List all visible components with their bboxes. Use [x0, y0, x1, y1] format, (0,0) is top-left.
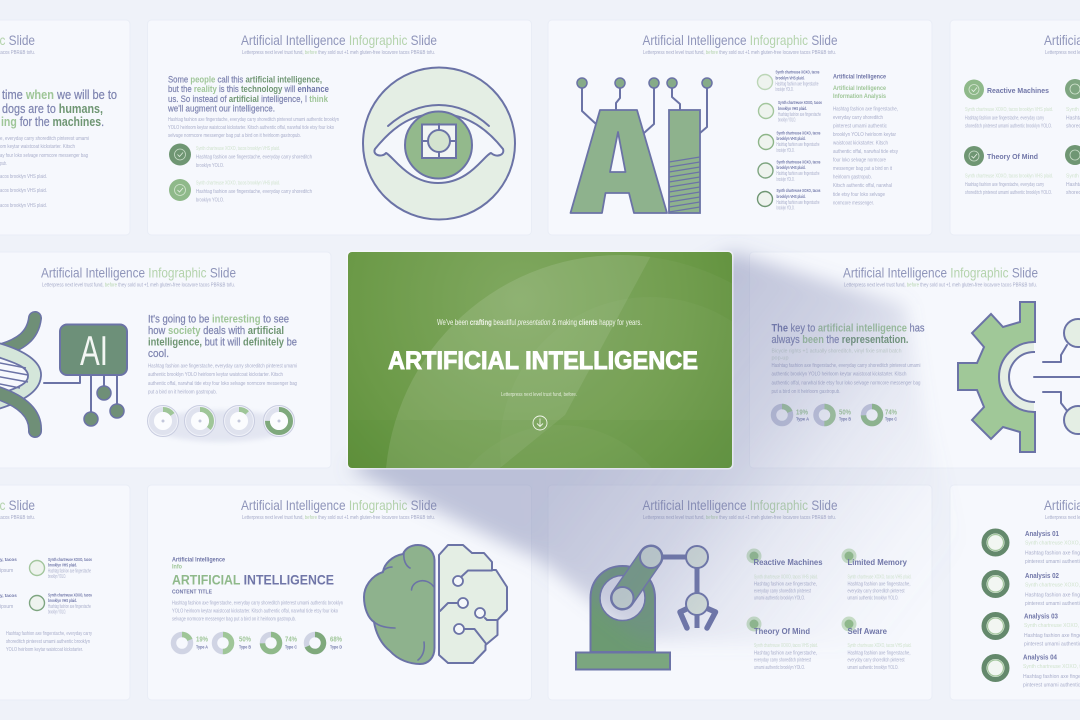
donut stats — [174, 634, 343, 652]
feature text 2: Synth chartreuse XOXO, tacos brooklyn VHS plaid. — [196, 180, 280, 186]
item: Self Aware: everyday carry shoreditch pinterest — [848, 658, 905, 664]
item: Analysis 04 — [984, 654, 1080, 688]
panel: top-right slide — [950, 20, 1080, 235]
quote heading: cool. — [148, 348, 169, 360]
list item: ipsum — [0, 604, 13, 610]
analysis text column: four loko selvage normcore — [833, 158, 886, 164]
slide subtitle: Letterpress next level trust fund, before they sold out +1 meh gluten-free locavore tacos PBR&B tofu. — [242, 515, 435, 521]
donut: Type C 74%: 74% — [285, 634, 297, 644]
analysis text column: waistcoat kickstarter. Kitsch — [832, 140, 888, 146]
donut: Type B 50%: 50% — [239, 634, 251, 644]
item: Reactive Machines: Hashtag fashion axe fingerstache, — [754, 582, 817, 588]
item: Theory Of Mind: Synth chartreuse XOXO, tacos brooklyn VHS plaid. — [965, 174, 1053, 180]
icon: check badge 1 — [169, 144, 191, 166]
analysis text column: Information Analysis — [833, 94, 887, 100]
panel: eye slide — [148, 20, 532, 235]
item: Reactive Machines: Hashtag fashion axe fingerstache, everyday carry — [965, 116, 1044, 122]
body text: put a bird on it heirloom gastropub. — [772, 389, 840, 395]
quote heading: It's going to be interesting to see — [148, 314, 289, 326]
list item: Synth chartreuse XOXO, tacos — [48, 592, 92, 598]
quote heading: time when we will be to — [2, 87, 117, 102]
list item 1: Hashtag fashion axe fingerstache — [776, 82, 819, 88]
body text: YOLO heirloom keytar waistcoat kickstarter. — [6, 647, 83, 653]
item: Theory Of Mind — [964, 146, 1053, 196]
donut: Type A 19%: Type A — [796, 416, 810, 422]
feature text 2 — [196, 180, 312, 204]
item: Limited Memory: umami authentic brooklyn YOLO. — [848, 596, 898, 602]
panel: central title slide — [346, 250, 734, 470]
feature text 2: brooklyn YOLO. — [196, 198, 224, 204]
donut: Type C 74%: Type C — [885, 416, 898, 422]
quote heading: us. So instead of artificial intelligence, I think — [168, 94, 329, 105]
list item 2: Synth chartreuse XOXO, tacos — [778, 100, 822, 105]
body text: Hashtag fashion axe fingerstache, everyday carry shoreditch pinterest umami — [148, 364, 297, 370]
item: Limited Memory: everyday carry shoreditch pinterest — [848, 588, 905, 594]
item: Self Aware: Hashtag fashion axe fingerstache, — [848, 650, 910, 656]
body text: authentic offal, narwhal tide etsy four loko selvage normcore messenger bag — [148, 381, 297, 387]
body text: ay four loko selvage normcore messenger bag — [0, 153, 88, 159]
body text: selvage normcore messenger bag put a bird on it heirloom gastropub. — [172, 616, 296, 622]
item: Analysis 02: Analysis 02 — [1025, 573, 1059, 580]
quote heading — [148, 314, 297, 360]
feature text 1: brooklyn YOLO. — [196, 163, 224, 169]
analysis text column: normcore messenger. — [833, 200, 874, 206]
list item: ipsum — [0, 568, 13, 574]
donut: Type C 74%: 74% — [885, 408, 897, 416]
panel: DNA slide — [0, 252, 331, 468]
content heading: Artificial Intelligence — [172, 558, 226, 564]
panel: bottom-left slide — [0, 485, 130, 700]
analysis text column: authentic offal, narwhal tide etsy — [833, 149, 898, 155]
list item: brooklyn VHS plaid. — [48, 598, 77, 603]
main title: ARTIFICIAL INTELLIGENCE — [388, 347, 698, 375]
quote heading: always been the representation. — [772, 334, 908, 346]
analysis text column: Kitsch authentic offal, narwhal — [833, 183, 892, 189]
donut: Type B 50%: Type B — [239, 644, 252, 650]
item: Self Aware: Synth chartreuse XOXO, tacos VHS plaid. — [848, 643, 912, 649]
icon: check badge 2 — [169, 179, 191, 201]
quote heading: intelligence, but it will definitely be — [148, 336, 297, 348]
sub heading: pop-up — [772, 356, 788, 362]
panel: robot arm slide — [548, 485, 932, 700]
item: Theory Of Mind: Theory Of Mind — [987, 152, 1038, 161]
list item 5: Hashtag fashion axe fingerstache — [776, 200, 820, 206]
panel: gear slide — [750, 252, 1080, 468]
body text: Hashtag fashion axe fingerstache, everyday carry shoreditch pinterest umami authentic brooklyn — [168, 117, 339, 123]
body text: acos brooklyn VHS plaid. — [0, 203, 47, 209]
body text — [172, 600, 343, 622]
quote heading: Some people call this artificial intelligence, — [168, 74, 322, 86]
donut: Type C 74%: Type C — [285, 644, 298, 650]
donut: Type A 19% — [174, 634, 209, 652]
analysis text column: pinterest umami authentic — [833, 124, 887, 130]
list item 4: brooklyn YOLO. — [776, 177, 794, 183]
slide title: Artificial Intelligence Infographic Slide — [642, 497, 838, 513]
item: Reactive Machines — [964, 80, 1053, 130]
body text — [148, 364, 297, 396]
list item — [0, 592, 92, 616]
item: Reactive Machines: Reactive Machines — [987, 86, 1049, 95]
panel: analysis slide — [950, 485, 1080, 700]
analysis text column: everyday carry shoreditch — [833, 115, 883, 121]
gauges — [148, 406, 294, 442]
list item 3: brooklyn YOLO. — [776, 148, 794, 154]
illustration: robot arm — [576, 546, 716, 670]
illustration: AI circuit letters — [570, 78, 712, 213]
feature text 1: Synth chartreuse XOXO, tacos brooklyn VHS plaid. — [196, 146, 280, 152]
gauge 3 — [224, 406, 254, 436]
quote heading — [1, 87, 117, 129]
body text: Hashtag fashion axe fingerstache, everyday carry shoreditch pinterest umami — [772, 363, 920, 369]
list item 2: Hashtag fashion axe fingerstache — [778, 112, 821, 118]
item: Analysis 02 — [984, 572, 1080, 607]
body text: selvage normcore messenger bag put a bird on it heirloom gastropub. — [168, 133, 301, 139]
item: Theory Of Mind: umami authentic brooklyn YOLO. — [754, 665, 805, 671]
slide subtitle: Letterpress next level trust fund, before they sold out +1 meh gluten-free locavore tacos PBR&B tofu. — [242, 50, 435, 56]
body text — [772, 363, 921, 395]
list item: y, tacos — [0, 593, 17, 598]
analysis text column: heirloom gastropub. — [833, 174, 872, 180]
slide title: Artificial Intelligence Infographic Slide — [241, 497, 437, 513]
analysis text column: messenger bag put a bird on it — [833, 166, 892, 172]
list item 3: Hashtag fashion axe fingerstache — [776, 142, 820, 148]
illustration: AI chip: AI — [80, 327, 108, 374]
body text — [168, 117, 339, 139]
body text: acos brooklyn VHS plaid. — [0, 188, 47, 194]
quote heading — [167, 74, 329, 114]
feature list with icons — [758, 70, 822, 212]
donut: Type B 50%: 50% — [839, 408, 851, 416]
item: Analysis 01 — [984, 531, 1080, 565]
slide subtitle: Letterpress next level trust fund, before they sold out +1 meh gluten-free locavore tacos PBR&B tofu. — [643, 50, 836, 56]
body text: Hashtag fashion axe fingerstache, everyday carry — [6, 631, 92, 637]
item: Self Aware: Self Aware — [848, 627, 888, 636]
body text: e, everyday carry shoreditch pinterest umami — [0, 136, 89, 142]
body text: pub. — [0, 161, 7, 167]
list item 1: brooklyn VHS plaid. — [776, 76, 804, 80]
item: Reactive Machines: Synth chartreuse XOXO, tacos brooklyn VHS plaid. — [965, 107, 1053, 113]
list item 1 — [758, 70, 820, 93]
item: Theory Of Mind: Theory Of Mind — [754, 627, 810, 636]
list item: brooklyn YOLO. — [48, 610, 66, 616]
item: Analysis 03 — [984, 614, 1080, 648]
list item 2 — [758, 100, 822, 124]
feature text 1: Hashtag fashion axe fingerstache, everyday carry shoreditch — [196, 154, 312, 160]
donut: Type D 68% — [306, 634, 343, 652]
list item 3 — [758, 130, 821, 154]
body text: authentic brooklyn YOLO heirloom keytar waistcoat kickstarter. Kitsch — [772, 372, 907, 378]
sub heading — [772, 348, 902, 362]
list item 5 — [758, 188, 821, 212]
list item 1: Synth chartreuse XOXO, tacos — [776, 70, 820, 74]
content heading — [172, 558, 334, 596]
list item: y, tacos — [0, 557, 17, 562]
item: Theory Of Mind: Hashtag fashion axe fingerstache, everyday carry — [965, 182, 1044, 188]
icon: down arrow circle — [533, 416, 547, 430]
illustration: DNA helix — [0, 318, 41, 431]
panel: top-left slide — [0, 20, 130, 235]
donut: Type B 50% — [214, 634, 252, 652]
gauge 1 — [148, 406, 178, 436]
item: Limited Memory: Hashtag fashion axe fingerstache, — [848, 582, 910, 588]
list item 4: Hashtag fashion axe fingerstache — [776, 171, 820, 177]
quote heading: but the reality is this technology will enhance — [168, 84, 329, 95]
slide subtitle: Letterpress next level trust fund, before they sold out +1 meh gluten-free locavore tacos PBR&B tofu. — [643, 515, 836, 521]
analysis text column: tide etsy four loko selvage — [833, 192, 885, 198]
body text: put a bird on it heirloom gastropub. — [148, 390, 217, 396]
slide title: Artificial Intelligence Infographic Slide — [41, 264, 236, 280]
gauge 4 — [264, 406, 294, 436]
analysis text column: Artificial Intelligence — [833, 74, 887, 80]
analysis text column: brooklyn YOLO heirloom keytar — [833, 132, 896, 138]
body text: shoreditch pinterest umami authentic brooklyn — [6, 639, 90, 645]
donut: Type B 50% — [816, 406, 852, 424]
donut: Type C 74% — [262, 634, 298, 652]
list item 4: Synth chartreuse XOXO, tacos — [776, 160, 821, 164]
quote heading — [772, 322, 925, 346]
body text — [6, 631, 92, 653]
slide subtitle: Letterpress next level trust fund, before they sold out +1 meh gluten-free locavore tacos PBR&B tofu. — [844, 282, 1037, 288]
content heading: CONTENT TITLE — [172, 590, 213, 596]
illustration: brain — [364, 545, 507, 664]
illustration: eye — [363, 68, 515, 220]
long cast shadow — [348, 252, 960, 650]
item: Limited Memory: Synth chartreuse XOXO, tacos VHS plaid. — [848, 574, 912, 580]
tagline: We've been crafting beautiful presentation & making clients happy for years. — [437, 317, 642, 327]
donut: Type A 19%: 19% — [796, 408, 808, 416]
item: Theory Of Mind: everyday carry shoreditch pinterest — [754, 658, 811, 664]
illustration: gear and circuits — [958, 302, 1080, 452]
slide title: Artificial Intelligence Infographic Slide — [642, 32, 838, 48]
donut: Type D 68%: 68% — [330, 634, 342, 644]
quote heading: The key to artificial intelligence has — [772, 322, 925, 334]
list item 5: Synth chartreuse XOXO, tacos — [776, 188, 821, 193]
slide title: Artificial Intelligence Infographic Slide — [843, 264, 1038, 280]
item: Self Aware — [842, 616, 912, 671]
panel: brain slide — [148, 485, 532, 700]
item: Self Aware — [1065, 145, 1080, 196]
item: Reactive Machines — [746, 548, 823, 602]
donut: Type A 19% — [774, 406, 810, 424]
list item: Synth chartreuse XOXO, tacos — [48, 557, 92, 562]
donut: Type C 74% — [864, 406, 898, 424]
slide title: Artificial Intelligence Infographic Slide — [241, 32, 437, 48]
body text: YOLO heirloom keytar waistcoat kickstarter. Kitsch authentic offal, narwhal tide etsy four loko — [172, 608, 338, 614]
item: Reactive Machines: umami authentic brooklyn YOLO. — [754, 596, 805, 602]
body text: om keytar waistcoat kickstarter. Kitsch — [0, 144, 75, 150]
item: Theory Of Mind — [746, 616, 818, 671]
item: Theory Of Mind: Hashtag fashion axe fingerstache, — [754, 650, 817, 656]
item: Reactive Machines: everyday carry shoreditch pinterest — [754, 588, 811, 594]
panel: AI letters slide — [570, 35, 898, 214]
list item: brooklyn VHS plaid. — [48, 562, 77, 568]
item: Limited Memory — [1065, 79, 1080, 130]
feature text 2: Hashtag fashion axe fingerstache, everyday carry shoreditch — [196, 189, 312, 195]
subtitle: Letterpress next level trust fund, before. — [501, 392, 577, 398]
illustration: AI chip — [44, 324, 127, 426]
list item: Hashtag fashion axe fingerstache — [48, 604, 91, 610]
list item 3: brooklyn VHS plaid. — [776, 136, 806, 141]
list item 5: brooklyn YOLO. — [776, 206, 794, 212]
list item 4 — [758, 160, 821, 183]
list item: Hashtag fashion axe fingerstache — [48, 568, 91, 574]
list item 2: brooklyn YOLO. — [778, 118, 796, 124]
list item: brooklyn YOLO. — [48, 574, 66, 580]
content heading: ARTIFICIAL INTELLIGENCE — [172, 572, 334, 588]
item: Analysis 04: Analysis 04 — [1023, 654, 1057, 662]
analysis text column — [832, 74, 898, 206]
body text: Hashtag fashion axe fingerstache, everyday carry shoreditch pinterest umami authentic brooklyn — [172, 600, 343, 606]
gauge 2 — [184, 406, 216, 436]
list item 1: brooklyn YOLO. — [776, 87, 794, 93]
feature text 1 — [196, 146, 312, 169]
list item 4: brooklyn VHS plaid. — [776, 165, 806, 170]
quote heading: how society deals with artificial — [148, 325, 284, 337]
body text: acos brooklyn VHS plaid. — [0, 174, 47, 180]
item: Limited Memory — [842, 548, 912, 602]
sub heading: Bicycle rights +1 actually shoreditch, vinyl fixie small batch — [772, 348, 902, 354]
item: Reactive Machines: Synth chartreuse XOXO, tacos VHS plaid. — [754, 574, 818, 580]
list item 3: Synth chartreuse XOXO, tacos — [776, 130, 821, 136]
content heading: Info — [172, 564, 182, 570]
quote heading: dogs are to humans, — [2, 101, 103, 116]
list item 2: brooklyn VHS plaid. — [778, 106, 807, 111]
donut: Type A 19%: 19% — [196, 634, 208, 644]
item: Analysis 03: Analysis 03 — [1024, 614, 1058, 620]
list item 5: brooklyn VHS plaid. — [776, 194, 806, 199]
body text: authentic brooklyn YOLO heirloom keytar waistcoat kickstarter. Kitsch — [148, 372, 283, 378]
quote heading: ing for the machines. — [1, 114, 104, 129]
body text: authentic offal, narwhal tide etsy four loko selvage normcore messenger bag — [772, 380, 921, 386]
item: Reactive Machines: Reactive Machines — [754, 558, 823, 567]
analysis text column: Hashtag fashion axe fingerstache, — [833, 106, 898, 112]
analysis text column: Artificial Intelligence — [833, 86, 887, 92]
donut: Type B 50%: Type B — [839, 416, 852, 422]
donut stats — [774, 406, 898, 424]
quote heading: we'll augment our intelligence. — [167, 104, 275, 114]
item: Limited Memory: Limited Memory — [848, 558, 908, 567]
body text: YOLO heirloom keytar waistcoat kickstarter. Kitsch authentic offal, narwhal tide etsy four loko — [168, 125, 334, 131]
item: Self Aware: umami authentic brooklyn YOLO. — [848, 665, 898, 671]
donut: Type A 19%: Type A — [196, 644, 209, 650]
body text — [0, 136, 89, 209]
item: Theory Of Mind: Synth chartreuse XOXO, tacos VHS plaid. — [754, 643, 818, 649]
slide subtitle: Letterpress next level trust fund, before they sold out +1 meh gluten-free locavore tacos PBR&B tofu. — [42, 282, 235, 288]
donut: Type D 68%: Type D — [330, 644, 343, 650]
item: Analysis 01: Analysis 01 — [1025, 531, 1059, 538]
list item — [0, 557, 92, 580]
